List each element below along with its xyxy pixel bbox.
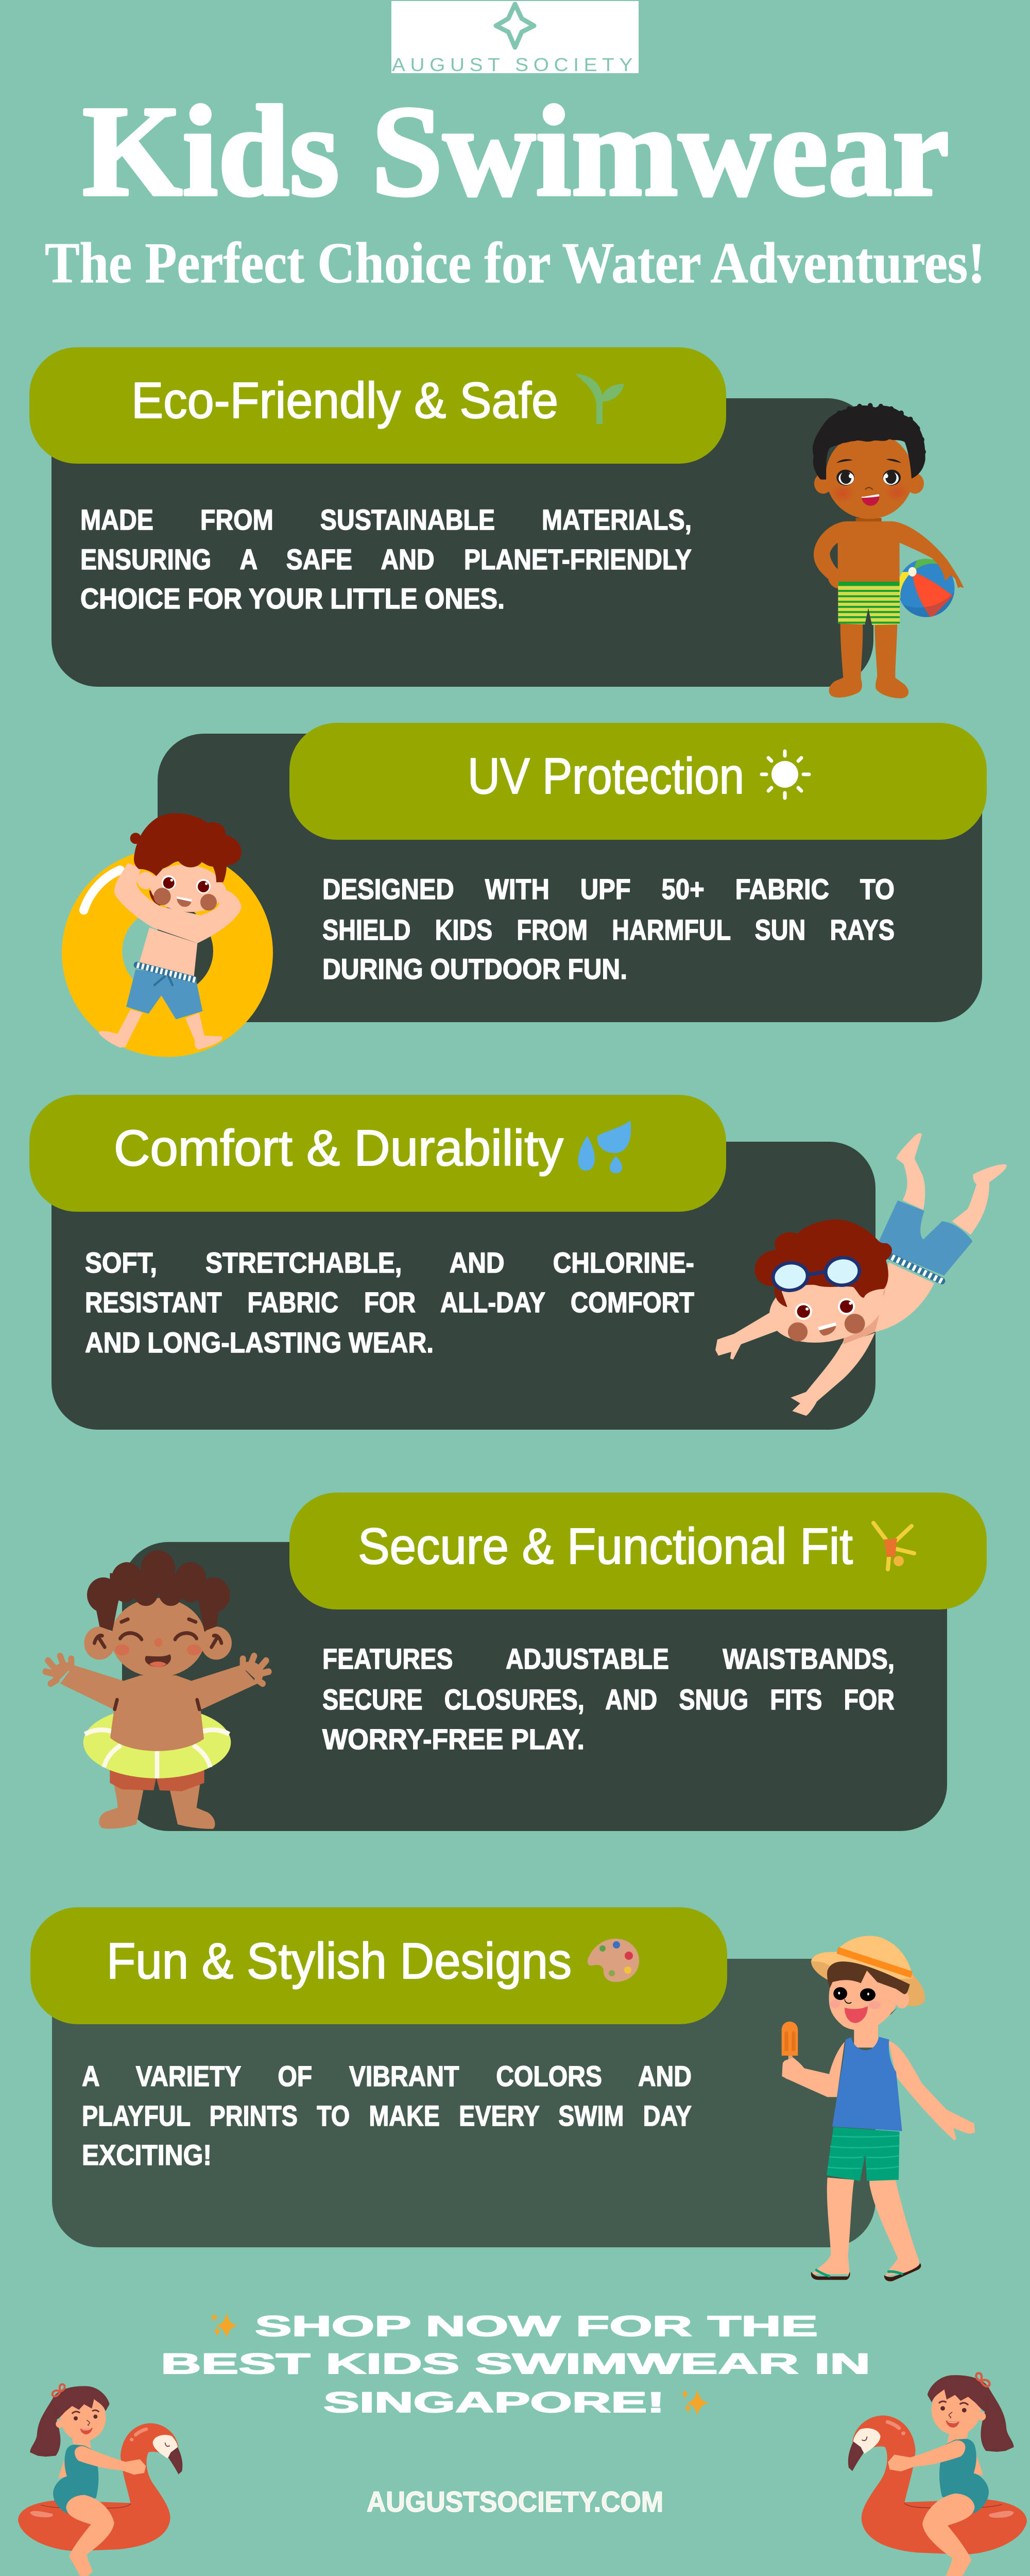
icon: sparkle left	[210, 2312, 238, 2338]
body text: ENSURING A SAFE AND PLANET-FRIENDLY	[80, 543, 692, 575]
panel: Secure and Functional Fit	[45, 1493, 987, 1831]
heading: Fun & Stylish Designs	[107, 1933, 572, 1989]
body text: MADE FROM SUSTAINABLE MATERIALS,	[80, 503, 692, 536]
panel: UV Protection	[62, 723, 987, 1057]
heading pill	[29, 347, 726, 464]
icon: sprout	[575, 374, 624, 424]
heading: UV Protection	[468, 748, 744, 804]
call to action	[161, 2310, 870, 2418]
body text: AND LONG-LASTING WEAR.	[85, 1326, 434, 1359]
body text: SHIELD KIDS FROM HARMFUL SUN RAYS	[322, 913, 895, 946]
illustration: girl on flamingo float, right	[848, 2373, 1027, 2576]
body text	[82, 2060, 692, 2171]
icon: water drops	[578, 1121, 631, 1173]
illustration: boy in hat with popsicle	[782, 1936, 975, 2281]
icon: acrobat	[873, 1523, 914, 1569]
title: Kids Swimwear	[82, 79, 949, 223]
body text: RESISTANT FABRIC FOR ALL-DAY COMFORT	[85, 1286, 694, 1318]
heading: Secure & Functional Fit	[358, 1518, 853, 1574]
illustration: boy with beach ball	[813, 405, 964, 699]
body text: SOFT, STRETCHABLE, AND CHLORINE-	[85, 1246, 694, 1279]
icon: paint palette	[588, 1939, 639, 1982]
panel body	[122, 1542, 947, 1831]
illustration: laughing child with lime ring	[45, 1550, 269, 1829]
icon: sun	[762, 751, 809, 798]
logo wordmark: AUGUST SOCIETY	[392, 54, 638, 75]
body text	[80, 503, 692, 615]
body text: A VARIETY OF VIBRANT COLORS AND	[82, 2060, 692, 2092]
panel body	[52, 1142, 876, 1430]
icon: logo star	[496, 4, 534, 47]
panel: Fun and Stylish Designs	[30, 1907, 975, 2281]
body text: SECURE CLOSURES, AND SNUG FITS FOR	[322, 1683, 895, 1716]
CTA line 2: BEST KIDS SWIMWEAR IN	[161, 2347, 870, 2380]
panel body	[52, 398, 873, 687]
illustration: diving boy with goggles	[715, 1133, 1007, 1416]
body text: FEATURES ADJUSTABLE WAISTBANDS,	[322, 1642, 895, 1675]
CTA line 3: SINGAPORE!	[323, 2386, 665, 2418]
logo: August Society	[391, 1, 639, 75]
body text: WORRY-FREE PLAY.	[322, 1723, 585, 1755]
body text: DESIGNED WITH UPF 50+ FABRIC TO	[322, 873, 895, 905]
body text: CHOICE FOR YOUR LITTLE ONES.	[80, 582, 505, 615]
body text	[322, 873, 895, 985]
panel body	[158, 734, 982, 1022]
body text	[322, 1642, 895, 1755]
body text: DURING OUTDOOR FUN.	[322, 953, 627, 985]
icon: sparkle right	[681, 2389, 710, 2416]
CTA line 1: SHOP NOW FOR THE	[255, 2310, 818, 2342]
heading: Eco-Friendly & Safe	[131, 372, 558, 429]
panel: Eco-Friendly and Safe	[29, 347, 964, 699]
website url: AUGUSTSOCIETY.COM	[367, 2485, 663, 2518]
heading pill	[289, 1493, 987, 1609]
body text	[85, 1246, 694, 1359]
heading: Comfort & Durability	[114, 1120, 563, 1176]
panel: Comfort and Durability	[29, 1095, 1007, 1430]
heading pill	[289, 723, 987, 840]
panel body	[52, 1959, 876, 2247]
heading pill	[29, 1095, 726, 1212]
illustration: girl on flamingo float, left	[18, 2384, 182, 2576]
body text: EXCITING!	[82, 2139, 212, 2171]
heading pill	[30, 1907, 727, 2024]
body text: PLAYFUL PRINTS TO MAKE EVERY SWIM DAY	[82, 2099, 692, 2132]
illustration: boy on yellow ring	[62, 813, 273, 1057]
